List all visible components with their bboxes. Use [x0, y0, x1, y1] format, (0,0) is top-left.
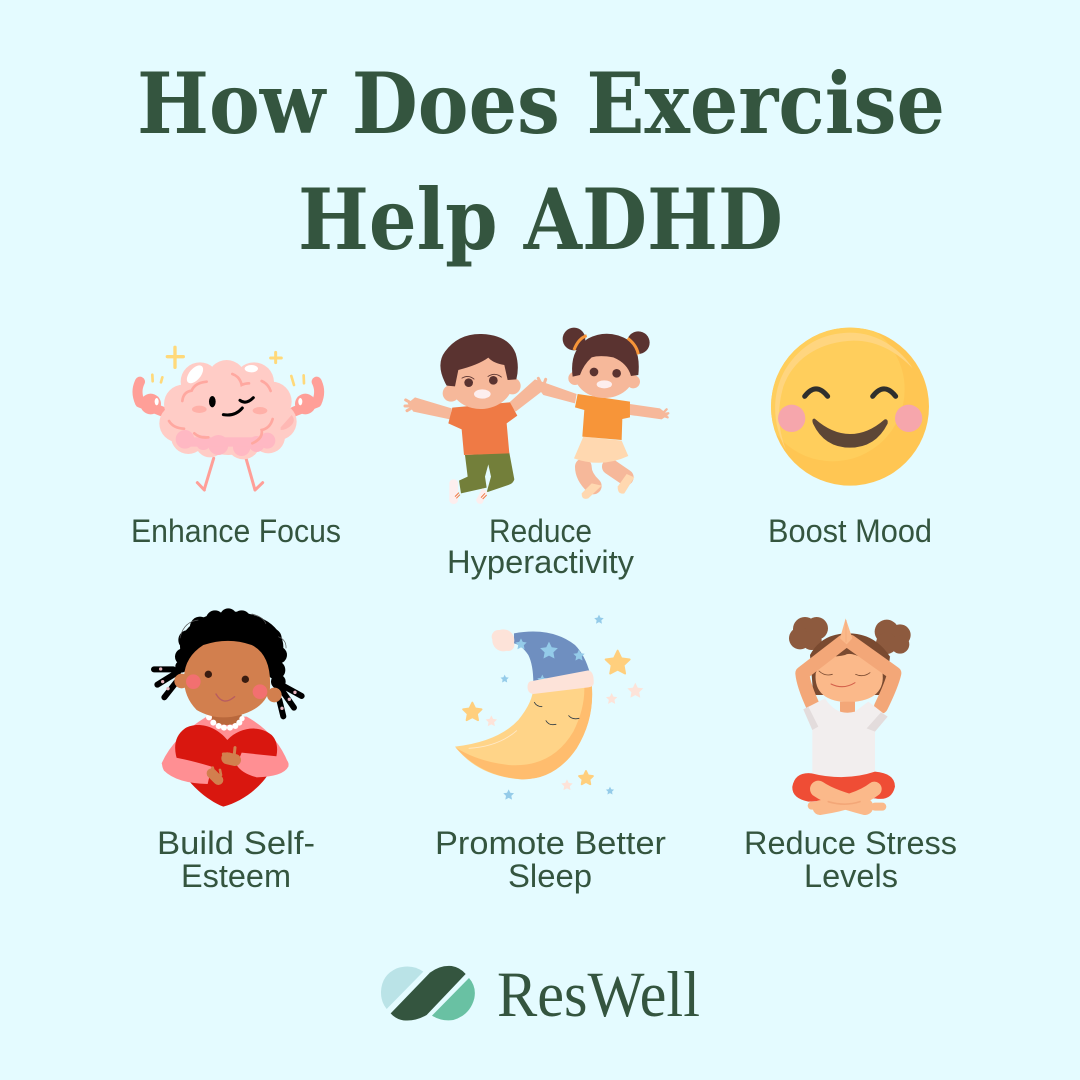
- icon: flexing brain: [137, 347, 319, 490]
- label: Boost Mood: Boost Mood: [768, 513, 932, 549]
- icon: smiling face: [770, 328, 929, 486]
- label: Reduce Hyperactivity: Hyperactivity: [447, 544, 634, 580]
- wordmark: ResWell: [497, 959, 700, 1031]
- label: Reduce Stress Levels: [744, 825, 957, 894]
- title: How Does Exercise: [137, 54, 945, 153]
- title: [137, 54, 945, 269]
- icon: child meditating: [789, 617, 911, 808]
- boy: [405, 334, 547, 504]
- label: Promote Better Sleep: Promote Better: [435, 825, 666, 861]
- label: Reduce Hyperactivity: [447, 513, 634, 580]
- label: Build Self-Esteem: [157, 825, 315, 894]
- icon: girl hugging heart: [154, 608, 302, 807]
- label: Build Self-Esteem: Esteem: [181, 858, 291, 894]
- label: Promote Better Sleep: Sleep: [508, 858, 592, 894]
- label: Reduce Hyperactivity: Reduce: [489, 513, 592, 549]
- label: Build Self-Esteem: Build Self-: [157, 825, 315, 861]
- label: Reduce Stress Levels: Reduce Stress: [744, 825, 957, 861]
- label: Promote Better Sleep: [435, 825, 666, 894]
- logo: ResWell: [381, 959, 700, 1031]
- icon: sleeping moon with cap: [455, 615, 643, 800]
- title: Help ADHD: [298, 170, 783, 269]
- icon: jumping children: [405, 328, 668, 504]
- logo mark: [381, 966, 475, 1021]
- girl: [538, 328, 668, 499]
- label: Reduce Stress Levels: Levels: [804, 858, 898, 894]
- label: Enhance Focus: Enhance Focus: [131, 513, 341, 549]
